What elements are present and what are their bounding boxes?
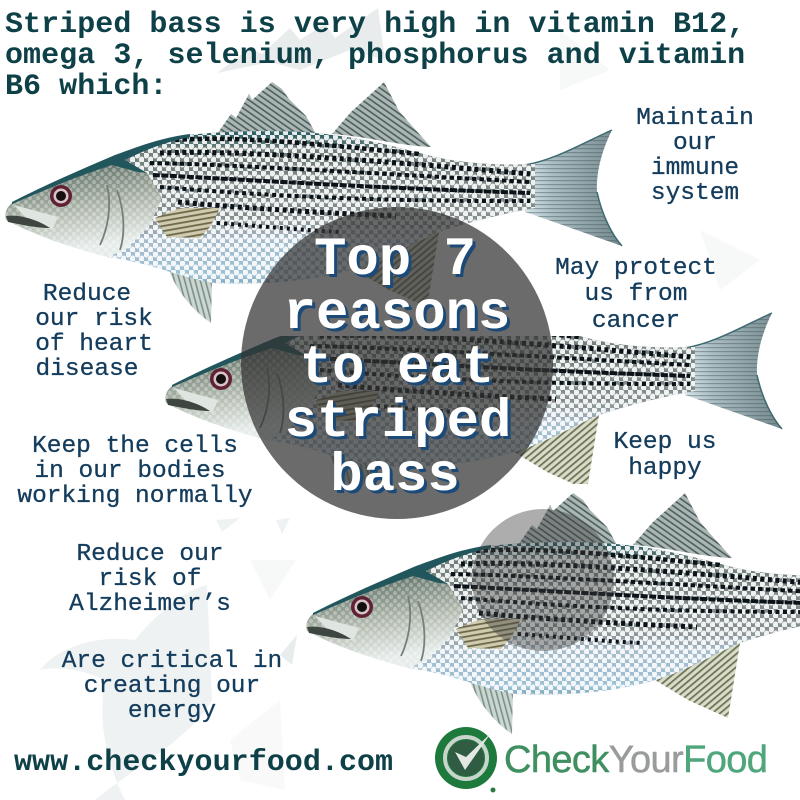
benefit: heart disease bbox=[35, 281, 153, 383]
logo: wordmark: CheckYourFood bbox=[504, 739, 767, 781]
circle title: reasons bbox=[284, 284, 510, 345]
circle title: to eat bbox=[303, 341, 497, 402]
benefit: Alzheimer's bbox=[69, 541, 231, 618]
benefit: cancer: cancer bbox=[592, 308, 680, 335]
fish: top striped bass bbox=[5, 82, 622, 323]
intro heading bbox=[5, 8, 745, 104]
benefit: immune system: our bbox=[673, 130, 717, 157]
circle title: Top 7 bbox=[314, 230, 476, 291]
circle title: Top 7 bbox=[317, 233, 479, 294]
benefit: immune system bbox=[636, 105, 754, 207]
benefit: energy: Are critical in bbox=[62, 648, 282, 675]
benefit: immune system: system bbox=[651, 180, 739, 207]
benefit: cancer: May protect bbox=[555, 255, 717, 282]
large translucent circle bbox=[241, 207, 553, 519]
circle title: reasons bbox=[287, 287, 513, 348]
benefit: cells: in our bodies bbox=[34, 458, 226, 485]
benefit: immune system: Maintain bbox=[636, 105, 754, 132]
benefit: happy bbox=[614, 429, 716, 482]
circle title: striped bbox=[288, 395, 514, 456]
intro heading: Striped bass is very high in vitamin B12, bbox=[5, 8, 745, 42]
circle title: striped bbox=[285, 392, 511, 453]
benefit: heart disease: of heart bbox=[35, 331, 153, 358]
circle title bbox=[284, 230, 514, 510]
benefit: heart disease: our risk bbox=[35, 306, 153, 333]
benefit: cancer bbox=[555, 255, 717, 335]
benefit: energy bbox=[62, 648, 282, 725]
benefit: energy: energy bbox=[128, 698, 216, 725]
fish: middle striped bass bbox=[165, 312, 782, 484]
website url: www.checkyourfood.com bbox=[14, 746, 393, 780]
benefit: heart disease: disease bbox=[36, 356, 138, 383]
benefit: happy: Keep us bbox=[614, 429, 716, 456]
benefit: immune system: immune bbox=[651, 155, 739, 182]
logo: check mark badge bbox=[435, 727, 497, 792]
circle title: to eat bbox=[300, 338, 494, 399]
benefit: cells: working normally bbox=[17, 483, 253, 510]
circle title: bass bbox=[330, 446, 460, 507]
intro heading: omega 3, selenium, phosphorus and vitamin bbox=[5, 39, 745, 73]
benefit: happy: happy bbox=[628, 455, 702, 482]
benefit: energy: creating our bbox=[84, 673, 260, 700]
benefit: cells: Keep the cells bbox=[32, 433, 238, 460]
benefit: cancer: us from bbox=[585, 281, 687, 308]
fish: bottom striped bass bbox=[306, 493, 800, 734]
benefit: Alzheimer's: Reduce our bbox=[76, 541, 224, 568]
benefit: heart disease: Reduce bbox=[43, 281, 131, 308]
benefit: Alzheimer's: risk of bbox=[99, 566, 201, 593]
intro heading: B6 which: bbox=[5, 70, 167, 104]
benefit: Alzheimer's: Alzheimer’s bbox=[69, 591, 231, 618]
benefit: cells bbox=[17, 433, 253, 510]
circle title: bass bbox=[333, 449, 463, 510]
small translucent circle bbox=[472, 509, 614, 651]
